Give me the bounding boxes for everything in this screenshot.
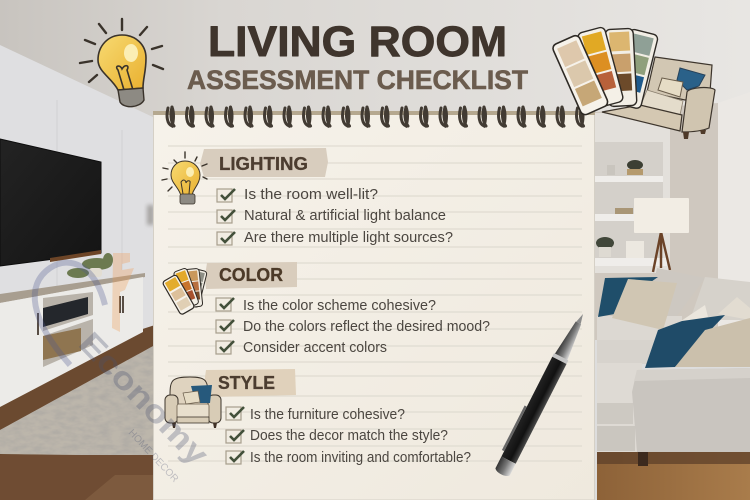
niche middle bbox=[595, 182, 663, 214]
shelf unit bbox=[595, 113, 670, 273]
color heading tape bbox=[205, 262, 297, 289]
niche top bbox=[595, 142, 663, 176]
shelf board bbox=[43, 315, 93, 336]
handles bbox=[38, 296, 123, 335]
panel: lighting section bbox=[162, 148, 453, 246]
receiver bbox=[43, 297, 88, 327]
sofa arm bbox=[682, 88, 715, 132]
highlight bbox=[124, 44, 138, 62]
console top bbox=[0, 273, 145, 303]
pen clip bbox=[502, 405, 527, 451]
right wall bbox=[595, 103, 718, 340]
swatch card 3 bbox=[605, 28, 637, 107]
left seat bbox=[597, 316, 682, 340]
basket pot bbox=[626, 241, 644, 258]
board 1 bbox=[595, 176, 663, 182]
icon: large light bulb bbox=[80, 19, 163, 107]
watermark word: Economy bbox=[72, 325, 216, 472]
filament bbox=[117, 66, 133, 90]
cream cushion bbox=[658, 78, 683, 97]
pen bbox=[492, 309, 590, 478]
books bbox=[615, 208, 633, 214]
swatch card 2 bbox=[577, 26, 624, 108]
lower floor planks bbox=[0, 455, 155, 500]
left wall bbox=[0, 45, 155, 400]
chaise base lower bbox=[597, 426, 635, 451]
sofa seat bbox=[640, 90, 683, 115]
logo orange mark bbox=[112, 253, 134, 332]
back cushion 1 bbox=[645, 268, 705, 328]
sofa illustration bbox=[602, 57, 715, 139]
sofa shadow bbox=[597, 450, 750, 464]
TV wall panel lines bbox=[57, 100, 122, 300]
icon: paint swatches and sofa bbox=[551, 26, 715, 139]
swatch card 4 bbox=[612, 28, 659, 109]
basket bbox=[43, 328, 81, 360]
tripod bbox=[653, 232, 670, 272]
title line 2: ASSESSMENT CHECKLIST bbox=[187, 65, 528, 95]
check item 1: Is the color scheme cohesive? bbox=[243, 298, 436, 314]
niche bottom bbox=[595, 221, 663, 258]
plant bbox=[67, 253, 113, 278]
pen band bbox=[552, 353, 568, 364]
watermark logo bbox=[35, 253, 216, 485]
lighter plank bbox=[85, 475, 155, 500]
blue pillow left bbox=[598, 277, 658, 317]
television bbox=[0, 139, 101, 266]
open shelf bbox=[43, 292, 93, 367]
plant pot bbox=[89, 268, 102, 277]
left floor bbox=[0, 325, 155, 500]
left chaise bbox=[597, 363, 642, 452]
ruled lines bbox=[168, 146, 582, 461]
back cushion 2 bbox=[690, 277, 750, 320]
chaise base bbox=[597, 403, 633, 424]
panel: color section bbox=[162, 262, 490, 356]
board 3 bbox=[595, 258, 667, 266]
title line 1: LIVING ROOM bbox=[208, 18, 507, 66]
media console bbox=[0, 253, 145, 407]
lower pot bbox=[599, 247, 611, 257]
right shelves bbox=[595, 113, 670, 273]
sofa base bbox=[602, 105, 682, 131]
swatch card 1 bbox=[551, 34, 609, 116]
paper bbox=[154, 114, 594, 500]
beige pillow right bbox=[675, 318, 750, 367]
lighting heading: LIGHTING bbox=[219, 154, 308, 174]
panel: style section bbox=[165, 369, 471, 466]
floor lamp bbox=[634, 198, 689, 272]
ceiling bbox=[0, 0, 750, 140]
check item 3: Are there multiple light sources? bbox=[244, 230, 453, 246]
curtain bbox=[718, 92, 750, 340]
icon: small bulb bbox=[162, 152, 207, 204]
plant box bbox=[627, 169, 643, 175]
beige pillow bbox=[612, 279, 677, 330]
lower plant bbox=[596, 237, 614, 249]
arm bbox=[632, 368, 750, 452]
logo arc bbox=[35, 263, 105, 365]
check item 2: Does the decor match the style? bbox=[250, 428, 448, 444]
spiral rings bbox=[167, 107, 584, 126]
check item 2: Do the colors reflect the desired mood? bbox=[243, 319, 490, 335]
shadow bbox=[147, 205, 154, 225]
sofa back bbox=[647, 57, 712, 100]
board 2 bbox=[595, 214, 663, 221]
white pillow right bbox=[718, 297, 750, 320]
console front bbox=[0, 277, 143, 407]
shade bbox=[634, 198, 689, 233]
check item 3: Consider accent colors bbox=[243, 340, 387, 356]
icon: armchair bbox=[165, 377, 221, 428]
pen end cap bbox=[494, 456, 516, 478]
pen cone bbox=[555, 320, 585, 360]
check item 3: Is the room inviting and comfortable? bbox=[250, 450, 471, 466]
rays bbox=[80, 19, 163, 82]
right floor bbox=[597, 450, 750, 500]
notebook panel bbox=[147, 107, 595, 500]
shelf plant bbox=[627, 160, 643, 170]
check item 2: Natural & artificial light balance bbox=[244, 208, 446, 224]
screw base bbox=[118, 88, 144, 107]
title bbox=[187, 18, 528, 95]
blue cushion bbox=[677, 68, 705, 90]
left seat lower bbox=[597, 340, 657, 364]
rug bbox=[0, 345, 155, 456]
pen tip bbox=[576, 313, 585, 324]
lighting heading tape bbox=[200, 148, 328, 177]
watermark tagline: HOME DECOR bbox=[126, 428, 180, 485]
wooden ledge bbox=[50, 250, 101, 262]
blue pillow right bbox=[645, 315, 725, 368]
check item 1: Is the room well-lit? bbox=[244, 187, 378, 203]
sofa feet bbox=[683, 130, 706, 139]
arm top bbox=[634, 368, 750, 381]
white pillow bbox=[672, 305, 708, 327]
pen barrel bbox=[501, 357, 567, 464]
glass bbox=[98, 35, 146, 90]
style heading tape bbox=[204, 369, 296, 397]
binding bar bbox=[153, 111, 595, 115]
check item 1: Is the furniture cohesive? bbox=[250, 407, 405, 423]
icon: small swatches bbox=[162, 268, 207, 315]
style heading: STYLE bbox=[218, 373, 275, 393]
vase bbox=[607, 165, 615, 175]
color heading: COLOR bbox=[219, 265, 283, 285]
sofa bbox=[597, 268, 750, 466]
sofa foot bbox=[638, 452, 648, 466]
